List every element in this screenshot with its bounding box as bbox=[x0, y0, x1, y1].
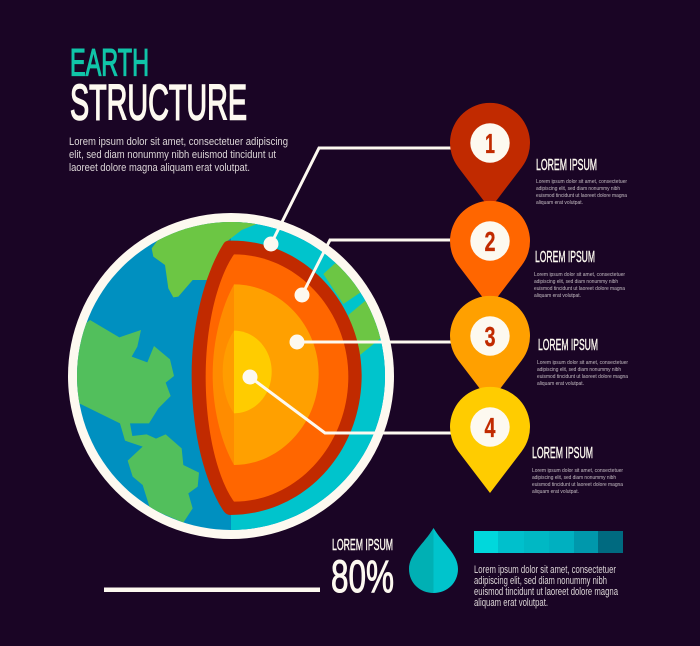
text block 1: aliquam erat volutpat. bbox=[536, 200, 583, 206]
title bbox=[70, 42, 247, 130]
text block 1: Lorem ipsum dolor sit amet, consectetuer bbox=[536, 179, 627, 185]
connector lines bbox=[250, 148, 452, 433]
bottom text: euismod tincidunt ut laoreet dolore magna bbox=[474, 586, 618, 598]
text block 3: LOREM IPSUM bbox=[538, 337, 598, 354]
bottom text: Lorem ipsum dolor sit amet, consectetuer bbox=[474, 564, 616, 576]
text block 4: adipiscing elit, sed diam nonummy nibh bbox=[532, 475, 616, 481]
text block 1: euismod tincidunt ut laoreet dolore magna bbox=[536, 193, 628, 199]
text block 4 bbox=[532, 445, 624, 495]
pin 4 bbox=[450, 387, 530, 493]
baseline rule bbox=[104, 588, 320, 592]
icon: water drop bbox=[409, 528, 458, 593]
pin 3: 3 bbox=[484, 321, 496, 352]
text block 2 bbox=[534, 249, 626, 299]
text block 1 bbox=[536, 157, 628, 206]
text block 3: adipiscing elit, sed diam nonummy nibh bbox=[537, 367, 621, 373]
text block 2: adipiscing elit, sed diam nonummy nibh bbox=[534, 279, 618, 285]
gradient bar bbox=[474, 531, 623, 553]
layer marker dots bbox=[242, 236, 310, 384]
text block 4: euismod tincidunt ut laoreet dolore magna bbox=[532, 482, 624, 488]
pin 2: 2 bbox=[484, 226, 496, 257]
text block 1: LOREM IPSUM bbox=[536, 157, 597, 174]
layer: mantle bbox=[206, 254, 348, 502]
intro text: Lorem ipsum dolor sit amet, consectetuer adipiscing bbox=[69, 136, 288, 148]
title: STRUCTURE bbox=[70, 74, 247, 130]
pin 2 bbox=[450, 201, 530, 307]
text block 2: aliquam erat volutpat. bbox=[534, 293, 581, 299]
title: EARTH bbox=[70, 42, 149, 84]
text block 3: aliquam erat volutpat. bbox=[537, 381, 584, 387]
text block 3 bbox=[537, 337, 629, 387]
earth globe bbox=[63, 213, 396, 540]
text block 2: LOREM IPSUM bbox=[535, 249, 595, 266]
text block 4: aliquam erat volutpat. bbox=[532, 489, 579, 495]
text block 3: Lorem ipsum dolor sit amet, consectetuer bbox=[537, 360, 628, 366]
pin 3 bbox=[450, 296, 530, 402]
intro text: elit, sed diam nonummy nibh euismod tincidunt ut bbox=[69, 149, 276, 161]
pin 1 bbox=[450, 103, 530, 209]
bottom text: adipiscing elit, sed diam nonummy nibh bbox=[474, 575, 607, 587]
intro text: laoreet dolore magna aliquam erat volutpat. bbox=[69, 162, 250, 174]
stat: 80%: 80% bbox=[331, 551, 394, 602]
text block 1: adipiscing elit, sed diam nonummy nibh bbox=[536, 186, 620, 192]
stat: 80% bbox=[331, 537, 394, 602]
text block 4: Lorem ipsum dolor sit amet, consectetuer bbox=[532, 468, 623, 474]
text block 4: LOREM IPSUM bbox=[532, 445, 593, 462]
text block 3: euismod tincidunt ut laoreet dolore magna bbox=[537, 374, 629, 380]
continent: north-east bbox=[323, 263, 387, 355]
continent: west and south bbox=[77, 320, 199, 522]
layer: outer core bbox=[213, 284, 319, 465]
stat: 80%: LOREM IPSUM bbox=[332, 537, 393, 554]
pin 4: 4 bbox=[484, 412, 496, 443]
continent: north bbox=[152, 222, 256, 298]
text block 2: euismod tincidunt ut laoreet dolore magna bbox=[534, 286, 626, 292]
intro text bbox=[69, 136, 288, 174]
layer: inner core bbox=[223, 331, 272, 413]
layer: crust bbox=[192, 241, 362, 515]
pin 1: 1 bbox=[485, 128, 495, 159]
bottom text bbox=[474, 564, 618, 609]
text block 2: Lorem ipsum dolor sit amet, consectetuer bbox=[534, 272, 625, 278]
bottom text: aliquam erat volutpat. bbox=[474, 597, 548, 609]
